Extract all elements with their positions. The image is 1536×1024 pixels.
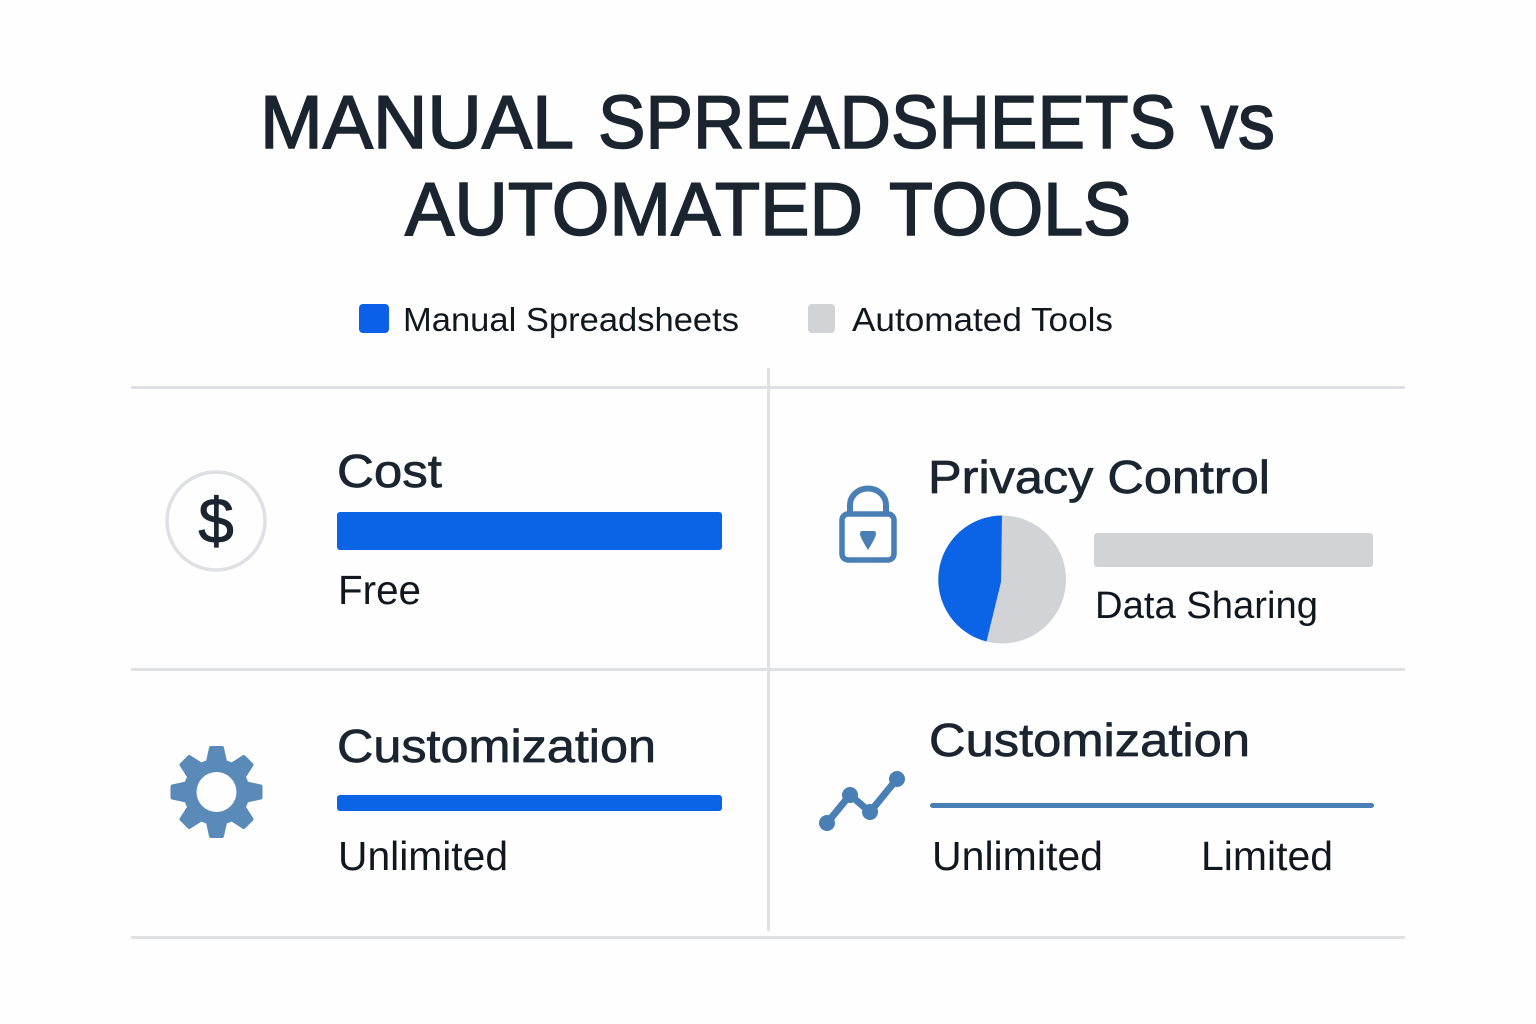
pie chart [938, 516, 1066, 644]
cost label: Free [338, 567, 421, 613]
title: SPREADSHEETS [598, 80, 1176, 164]
cost bar [337, 512, 722, 550]
legend [359, 301, 1113, 338]
limited label: Limited [1201, 833, 1333, 879]
title: MANUAL [260, 80, 574, 164]
icon: gear [172, 748, 260, 836]
legend: Automated Tools [852, 301, 1113, 338]
customization heading: Customization [337, 720, 656, 772]
icon: lock [842, 489, 894, 560]
panel: customization left [172, 720, 722, 879]
cost heading: Cost [337, 445, 442, 497]
title: vs [1201, 76, 1275, 165]
unlimited label: Unlimited [338, 833, 508, 879]
title [260, 76, 1275, 251]
data sharing bar [1094, 533, 1373, 567]
icon: line chart [819, 771, 905, 831]
panel: privacy control [842, 451, 1373, 644]
data sharing label: Data Sharing [1095, 585, 1318, 627]
title: TOOLS [889, 167, 1131, 251]
title: AUTOMATED [405, 167, 863, 251]
customization heading: Customization [929, 714, 1250, 766]
privacy heading: Privacy Control [928, 451, 1270, 503]
icon: dollar: $ [198, 485, 234, 557]
legend: Manual Spreadsheets [403, 301, 739, 338]
icon: dollar [167, 472, 265, 570]
panel: customization right [819, 714, 1374, 879]
unlimited label: Unlimited [932, 833, 1103, 879]
panel: cost [167, 445, 722, 613]
customization bar [337, 795, 722, 811]
range line [930, 803, 1374, 808]
